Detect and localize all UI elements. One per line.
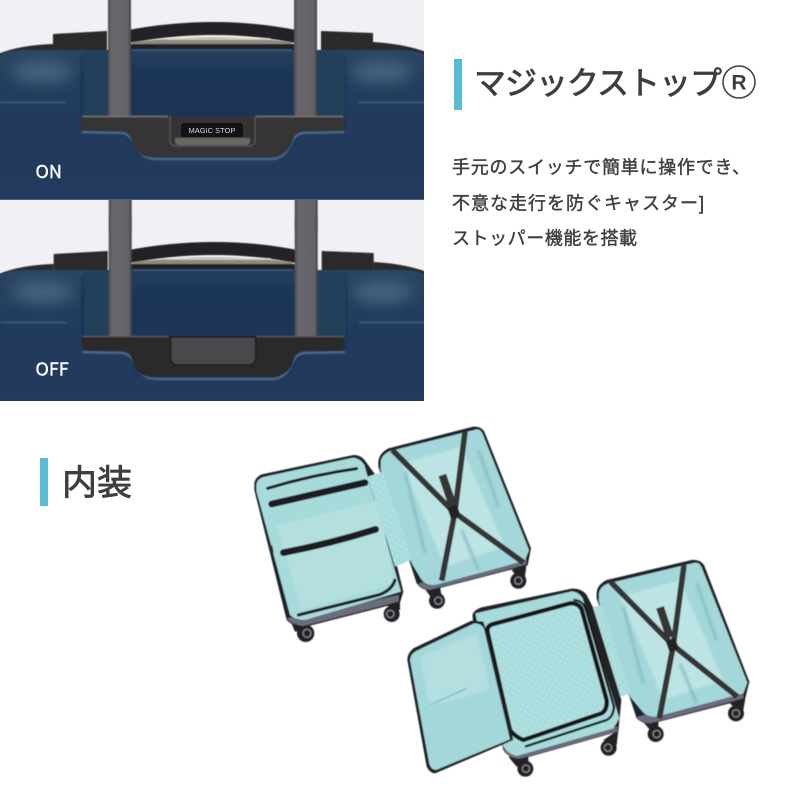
wheels bbox=[508, 698, 745, 777]
label: MAGIC STOP button: MAGIC STOP bbox=[189, 126, 235, 135]
photo: open suitcase with packing cube bbox=[407, 560, 749, 777]
text block: description: 不意な走行を防ぐキャスター] bbox=[452, 194, 704, 214]
middle shell bbox=[473, 589, 621, 759]
right shell bbox=[378, 427, 531, 591]
text block: description bbox=[452, 158, 750, 248]
flap bbox=[587, 605, 631, 699]
label: ON: ON bbox=[36, 158, 62, 184]
accent bar: magic stop bbox=[454, 59, 462, 110]
straps bbox=[392, 432, 524, 581]
text block: description: 手元のスイッチで簡単に操作でき、 bbox=[452, 158, 750, 178]
zippers bbox=[268, 469, 395, 615]
packing cube bbox=[487, 600, 614, 747]
photo: magic stop OFF bbox=[0, 200, 424, 401]
heading: magic stop: マジックストップ bbox=[474, 65, 722, 101]
photo: magic stop ON bbox=[0, 0, 426, 200]
right shell bbox=[597, 560, 749, 724]
text block: description: ストッパー機能を搭載 bbox=[452, 228, 637, 248]
accent bar: interior bbox=[40, 458, 48, 506]
heading: interior: 内装 bbox=[62, 464, 132, 503]
flap bbox=[368, 472, 412, 567]
wheels bbox=[290, 563, 527, 642]
inner panel bbox=[277, 500, 393, 610]
label: MAGIC STOP button bbox=[181, 123, 243, 137]
heading: magic stop: R bbox=[731, 72, 747, 94]
left shell bbox=[254, 455, 403, 627]
open lid bbox=[407, 621, 513, 773]
photo: open suitcase with pockets bbox=[254, 427, 531, 642]
straps bbox=[611, 565, 737, 718]
label: OFF: OFF bbox=[36, 356, 69, 382]
